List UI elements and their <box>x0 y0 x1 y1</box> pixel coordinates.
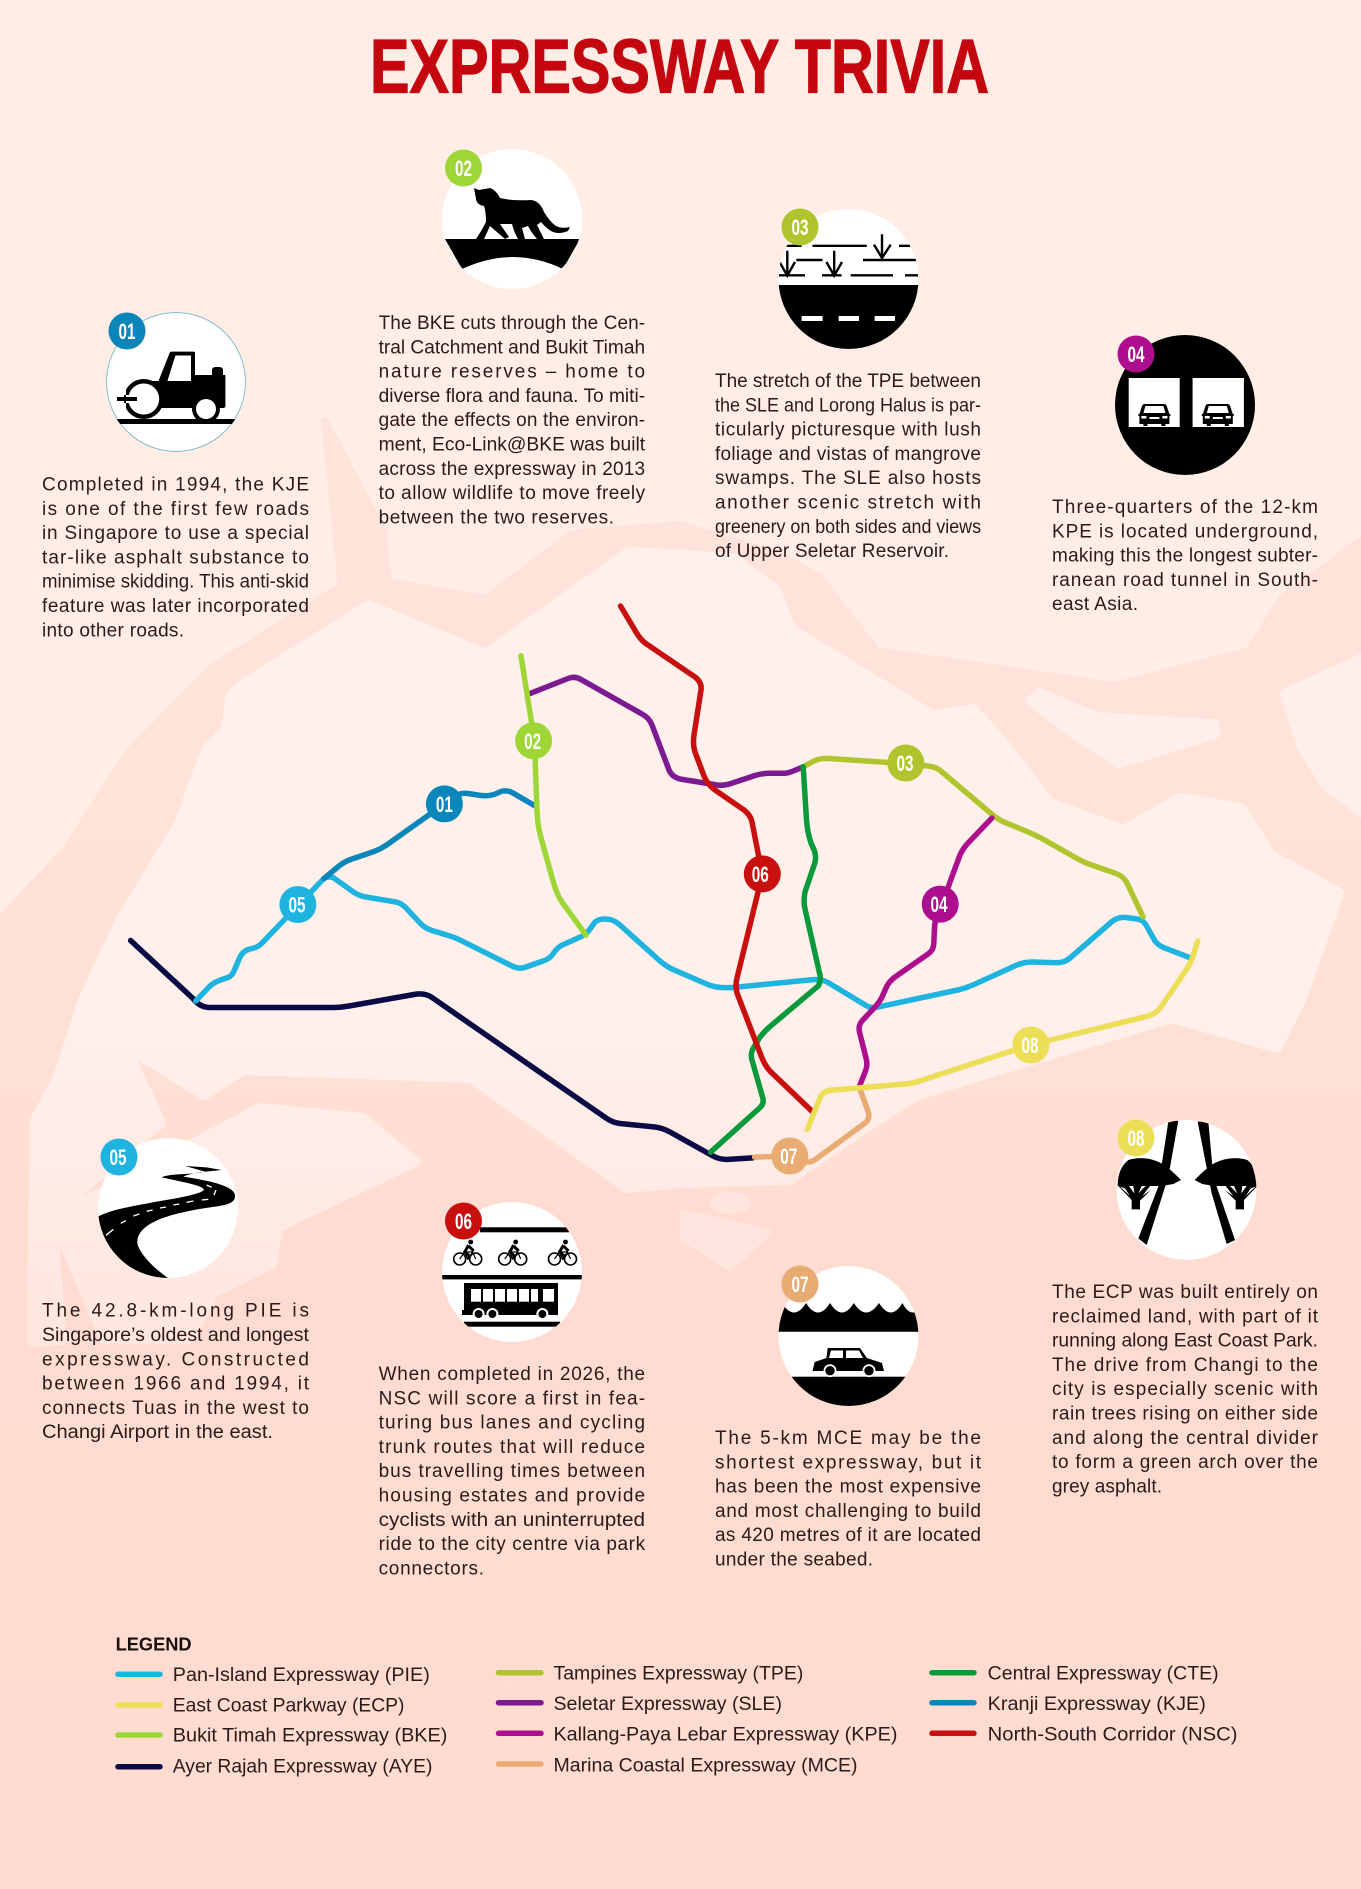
text: TPE: another scenic stretch with <box>715 492 981 514</box>
text: BKE: across the expressway in 2013 <box>379 459 645 480</box>
route: Pan-Island Expressway <box>196 877 1191 1008</box>
badge 06 <box>445 1202 482 1240</box>
text: BKE: gate the effects on the environ- <box>379 410 645 431</box>
text: BKE: to allow wildlife to move freely <box>379 483 646 504</box>
text: KPE: Three-quarters of the 12-km <box>1052 497 1318 518</box>
legend column 1: East Coast Parkway (ECP) <box>173 1696 404 1717</box>
route: Kranji Expressway <box>324 791 536 878</box>
icon: road through mangrove swamp <box>778 209 918 349</box>
badge 04: 04 <box>1128 342 1145 367</box>
legend column 2: Kallang-Paya Lebar Expressway (KPE) <box>554 1725 897 1746</box>
text: MCE <box>715 1428 982 1570</box>
panel: 08 East Coast Parkway <box>1052 1120 1319 1497</box>
text: ECP: reclaimed land, with part of it <box>1052 1306 1319 1327</box>
badge 05 <box>100 1138 138 1176</box>
badge 01 <box>108 312 146 350</box>
text: PIE: connects Tuas in the west to <box>42 1398 309 1419</box>
badge 07 <box>782 1266 818 1302</box>
text: BKE: ment, Eco-Link@BKE was built <box>379 434 646 456</box>
text: ECP: city is especially scenic with <box>1052 1379 1318 1400</box>
text: PIE: Changi Airport in the east. <box>42 1422 273 1443</box>
text: KJE: into other roads. <box>42 620 184 641</box>
legend column 3 <box>932 1663 1238 1746</box>
badge 02 <box>445 150 482 186</box>
text: KJE: minimise skidding. This anti-skid <box>42 572 309 593</box>
map marker 07: 07 <box>780 1144 797 1169</box>
text: NSC: When completed in 2026, the <box>379 1364 645 1385</box>
title: EXPRESSWAY TRIVIA <box>370 24 989 110</box>
text: TPE: swamps. The SLE also hosts <box>715 468 981 489</box>
text: MCE: as 420 metres of it are located <box>715 1525 981 1546</box>
legend column 2: Seletar Expressway (SLE) <box>554 1694 782 1715</box>
route: Bukit Timah Expressway <box>521 656 586 935</box>
map marker 01 <box>426 785 463 822</box>
text: BKE: The BKE cuts through the Cen- <box>379 313 645 334</box>
map marker 02 <box>515 722 552 759</box>
map marker 08 <box>1012 1026 1049 1064</box>
panel: 02 Bukit Timah Expressway <box>379 149 646 528</box>
text: PIE: The 42.8-km-long PIE is <box>42 1301 309 1322</box>
text: NSC: NSC will score a first in fea- <box>379 1388 645 1409</box>
panel: 03 Tampines Expressway <box>715 208 981 562</box>
legend column 2: Marina Coastal Expressway (MCE) <box>554 1756 858 1777</box>
text: MCE: and most challenging to build <box>715 1501 981 1522</box>
legend heading: LEGEND <box>116 1635 192 1655</box>
text: KJE: feature was later incorporated <box>42 596 309 617</box>
map marker 03: 03 <box>896 751 914 776</box>
text: NSC: trunk routes that will reduce <box>379 1437 645 1458</box>
badge 06: 06 <box>455 1209 472 1234</box>
badge 03: 03 <box>792 215 808 240</box>
map marker 03 <box>887 744 924 782</box>
text: ECP: The ECP was built entirely on <box>1052 1282 1318 1303</box>
legend column 1: Bukit Timah Expressway (BKE) <box>173 1726 447 1747</box>
text: KJE: tar-like asphalt substance to <box>42 547 309 568</box>
map marker 04: 04 <box>930 892 948 917</box>
text: BKE: nature reserves – home to <box>379 362 645 383</box>
text: BKE <box>379 313 646 528</box>
text: PIE: Singapore’s oldest and longest <box>42 1325 310 1346</box>
badge 05: 05 <box>110 1145 126 1170</box>
badge 08 <box>1118 1120 1154 1156</box>
text: TPE: foliage and vistas of mangrove <box>715 444 981 465</box>
icon: car under the seabed <box>778 1266 918 1406</box>
text: NSC: connectors. <box>379 1558 484 1579</box>
badge 08: 08 <box>1128 1126 1144 1151</box>
text: KJE: is one of the first few roads <box>42 499 309 520</box>
text: MCE: The 5-km MCE may be the <box>715 1428 981 1449</box>
map marker 04 <box>922 886 959 923</box>
route: North-South Corridor <box>620 606 812 1111</box>
badge 02: 02 <box>455 156 472 181</box>
panel: 06 North-South Corridor <box>379 1202 646 1579</box>
text: PIE <box>42 1301 310 1443</box>
text: BKE: diverse flora and fauna. To miti- <box>379 386 645 407</box>
map marker 08: 08 <box>1022 1033 1038 1058</box>
legend column 2 <box>498 1663 897 1777</box>
legend column 3: Kranji Expressway (KJE) <box>988 1694 1206 1715</box>
text: KJE: in Singapore to use a special <box>42 523 309 544</box>
icon: road roller <box>106 312 246 452</box>
map marker 01: 01 <box>436 792 453 817</box>
text: ECP: and along the central divider <box>1052 1428 1319 1449</box>
panel: 01 Kranji Expressway <box>42 312 309 641</box>
map marker 02: 02 <box>524 729 541 754</box>
text: TPE <box>715 371 981 562</box>
text: KPE: ranean road tunnel in South- <box>1052 570 1318 591</box>
text: TPE: ticularly picturesque with lush <box>715 420 981 441</box>
text: KPE: making this the longest subter- <box>1052 546 1318 567</box>
text: BKE: between the two reserves. <box>379 507 614 528</box>
badge 03 <box>782 208 818 246</box>
text: NSC: bus travelling times between <box>379 1461 645 1482</box>
text: NSC: housing estates and provide <box>379 1486 645 1506</box>
text: KJE <box>42 474 309 641</box>
route: Marina Coastal Expressway <box>755 1089 869 1162</box>
legend column 1: Pan-Island Expressway (PIE) <box>173 1665 430 1686</box>
text: PIE: between 1966 and 1994, it <box>42 1374 310 1395</box>
icon: leopard on eco-link <box>442 149 582 289</box>
icon: winding road <box>97 1138 238 1287</box>
text: PIE: expressway. Constructed <box>42 1349 309 1370</box>
legend <box>116 1635 1238 1778</box>
map marker 07 <box>771 1138 808 1174</box>
map marker 05 <box>279 886 316 923</box>
route: East Coast Parkway <box>807 941 1198 1129</box>
legend column 3: Central Expressway (CTE) <box>988 1663 1219 1684</box>
text: KJE: Completed in 1994, the KJE <box>42 474 309 496</box>
text: KPE: KPE is located underground, <box>1052 521 1318 542</box>
route: Kallang-Paya Lebar Expressway <box>859 818 992 1085</box>
text: MCE: under the seabed. <box>715 1550 873 1570</box>
map marker 06 <box>744 855 781 892</box>
icon: cycling lane and bus lane <box>440 1202 585 1342</box>
route: Tampines Expressway <box>803 758 1143 917</box>
text: BKE: tral Catchment and Bukit Timah <box>379 337 645 358</box>
legend column 3: North-South Corridor (NSC) <box>988 1725 1238 1746</box>
text: MCE: has been the most expensive <box>715 1477 981 1498</box>
route: Ayer Rajah Expressway <box>131 940 753 1159</box>
text: ECP: running along East Coast Park. <box>1052 1331 1318 1352</box>
route: Seletar Expressway <box>530 677 803 785</box>
icon: rain trees over road <box>1116 1120 1258 1260</box>
text: NSC <box>379 1364 646 1579</box>
panel: 07 Marina Coastal Expressway <box>715 1266 982 1570</box>
text: KPE <box>1052 497 1318 615</box>
text: MCE: shortest expressway, but it <box>715 1452 982 1473</box>
text: KPE: east Asia. <box>1052 594 1138 615</box>
badge 04 <box>1118 336 1154 372</box>
text: TPE: The stretch of the TPE between <box>715 371 981 392</box>
badge 07: 07 <box>792 1272 808 1297</box>
badge 01: 01 <box>118 319 136 344</box>
text: ECP: to form a green arch over the <box>1052 1452 1318 1473</box>
text: NSC: turing bus lanes and cycling <box>379 1413 645 1434</box>
text: ECP: rain trees rising on either side <box>1052 1404 1318 1424</box>
legend column 1: Ayer Rajah Expressway (AYE) <box>173 1757 432 1778</box>
map marker 06: 06 <box>752 862 769 887</box>
text: ECP: The drive from Changi to the <box>1052 1355 1318 1376</box>
route: Central Expressway <box>711 767 820 1152</box>
map: expressway network <box>131 606 1198 1174</box>
legend column 2: Tampines Expressway (TPE) <box>554 1663 803 1684</box>
text: NSC: ride to the city centre via park <box>379 1534 646 1555</box>
panel: 04 Kallang-Paya Lebar Expressway <box>1052 335 1318 615</box>
text: TPE: the SLE and Lorong Halus is par- <box>715 395 981 416</box>
text: TPE: greenery on both sides and views <box>715 517 981 538</box>
text: TPE: of Upper Seletar Reservoir. <box>715 541 949 562</box>
text: ECP <box>1052 1282 1319 1497</box>
legend column 1 <box>118 1665 447 1778</box>
text: NSC: cyclists with an uninterrupted <box>379 1510 645 1531</box>
text: ECP: grey asphalt. <box>1052 1476 1162 1497</box>
icon: twin tunnel with cars <box>1115 335 1255 475</box>
panel: 05 Pan-Island Expressway <box>42 1138 310 1443</box>
map marker 05: 05 <box>288 892 306 918</box>
